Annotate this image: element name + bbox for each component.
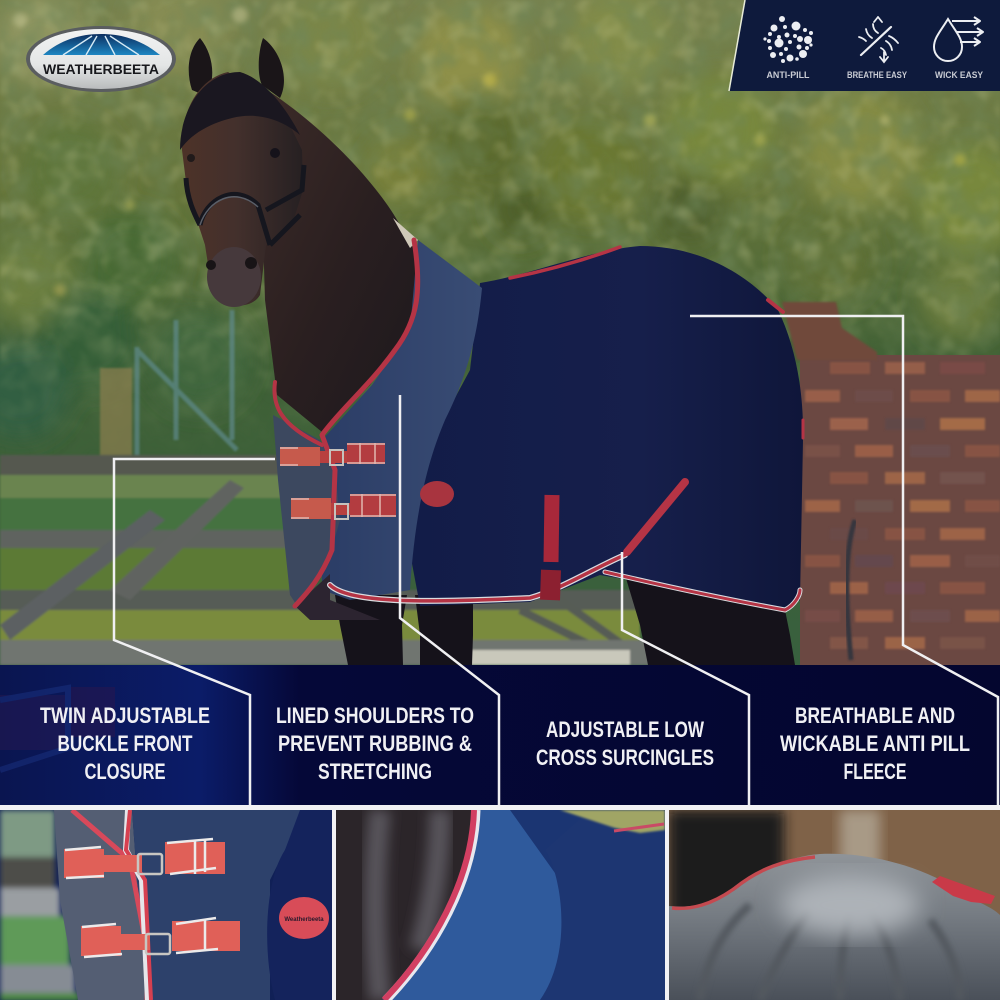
text: lined shoulders: STRETCHING — [318, 759, 432, 784]
logo badge — [279, 897, 329, 939]
foliage texture — [0, 0, 1000, 460]
rug shoulder panel — [322, 240, 482, 600]
text: twin adjustable buckle front closure — [40, 703, 210, 784]
text: breathable and wickable — [780, 703, 970, 784]
text: adjustable low cross surcingles — [536, 717, 714, 770]
label: anti-pill: ANTI-PILL — [766, 70, 810, 80]
wooden fence — [0, 455, 650, 665]
brick wall — [790, 350, 1000, 665]
callout: front closure — [114, 459, 275, 805]
rug — [273, 218, 803, 620]
rug wither patch — [393, 218, 418, 248]
horse muzzle — [207, 247, 261, 307]
logo: Weatherbeeta: WEATHERBEETA — [43, 61, 159, 77]
photo: lined shoulders detail — [336, 810, 665, 1000]
brick wall cap — [782, 302, 877, 360]
icon: breathe easy — [859, 17, 898, 62]
horse forelock — [180, 72, 300, 150]
logo: Weatherbeeta — [26, 26, 176, 92]
text: breathable and wickable: FLEECE — [844, 759, 906, 784]
callout: fleece — [690, 316, 998, 805]
text: lined shoulders: PREVENT RUBBING & — [278, 731, 472, 756]
text: lined shoulders: LINED SHOULDERS TO — [276, 703, 474, 728]
callout: lined shoulders — [400, 395, 499, 805]
straps — [64, 842, 240, 956]
horse hind and front legs — [335, 575, 795, 665]
text: adjustable low cross surcingles: CROSS SURCINGLES — [536, 745, 714, 770]
photo: fleece detail — [669, 810, 1000, 1000]
rug body — [400, 246, 803, 610]
front buckle straps — [280, 443, 396, 519]
text: lined shoulders — [276, 703, 474, 784]
text: twin adjustable buckle front closure: TWIN ADJUSTABLE — [40, 703, 210, 728]
label: wick easy: WICK EASY — [935, 70, 983, 80]
horse head — [182, 72, 303, 306]
rug logo badge — [420, 481, 454, 507]
callout: surcingles — [622, 552, 749, 805]
panel: features band — [0, 665, 1000, 805]
text: twin adjustable buckle front closure: CLOSURE — [84, 759, 166, 784]
panel: feature icons — [729, 0, 1000, 91]
photo: front closure detail: Weatherbeeta — [284, 917, 324, 923]
icon: anti-pill — [763, 16, 813, 63]
text: twin adjustable buckle front closure: BUCKLE FRONT — [58, 731, 193, 756]
horse — [180, 38, 795, 665]
white frame lines — [0, 805, 1000, 810]
horse ears — [189, 38, 284, 98]
text: adjustable low cross surcingles: ADJUSTABLE LOW — [546, 717, 704, 742]
rug shadow foot — [295, 574, 380, 620]
halter — [186, 165, 304, 245]
blurred gate — [100, 310, 237, 503]
rug chest panel — [273, 415, 340, 610]
label: breathe easy: BREATHE EASY — [847, 70, 907, 80]
photo: front closure detail — [0, 810, 332, 1000]
rug red trim — [274, 240, 803, 610]
horse neck — [262, 92, 420, 432]
icon: wick easy — [934, 17, 983, 61]
photo background: foliage — [0, 0, 1000, 670]
text: breathable and wickable: BREATHABLE AND — [795, 703, 955, 728]
